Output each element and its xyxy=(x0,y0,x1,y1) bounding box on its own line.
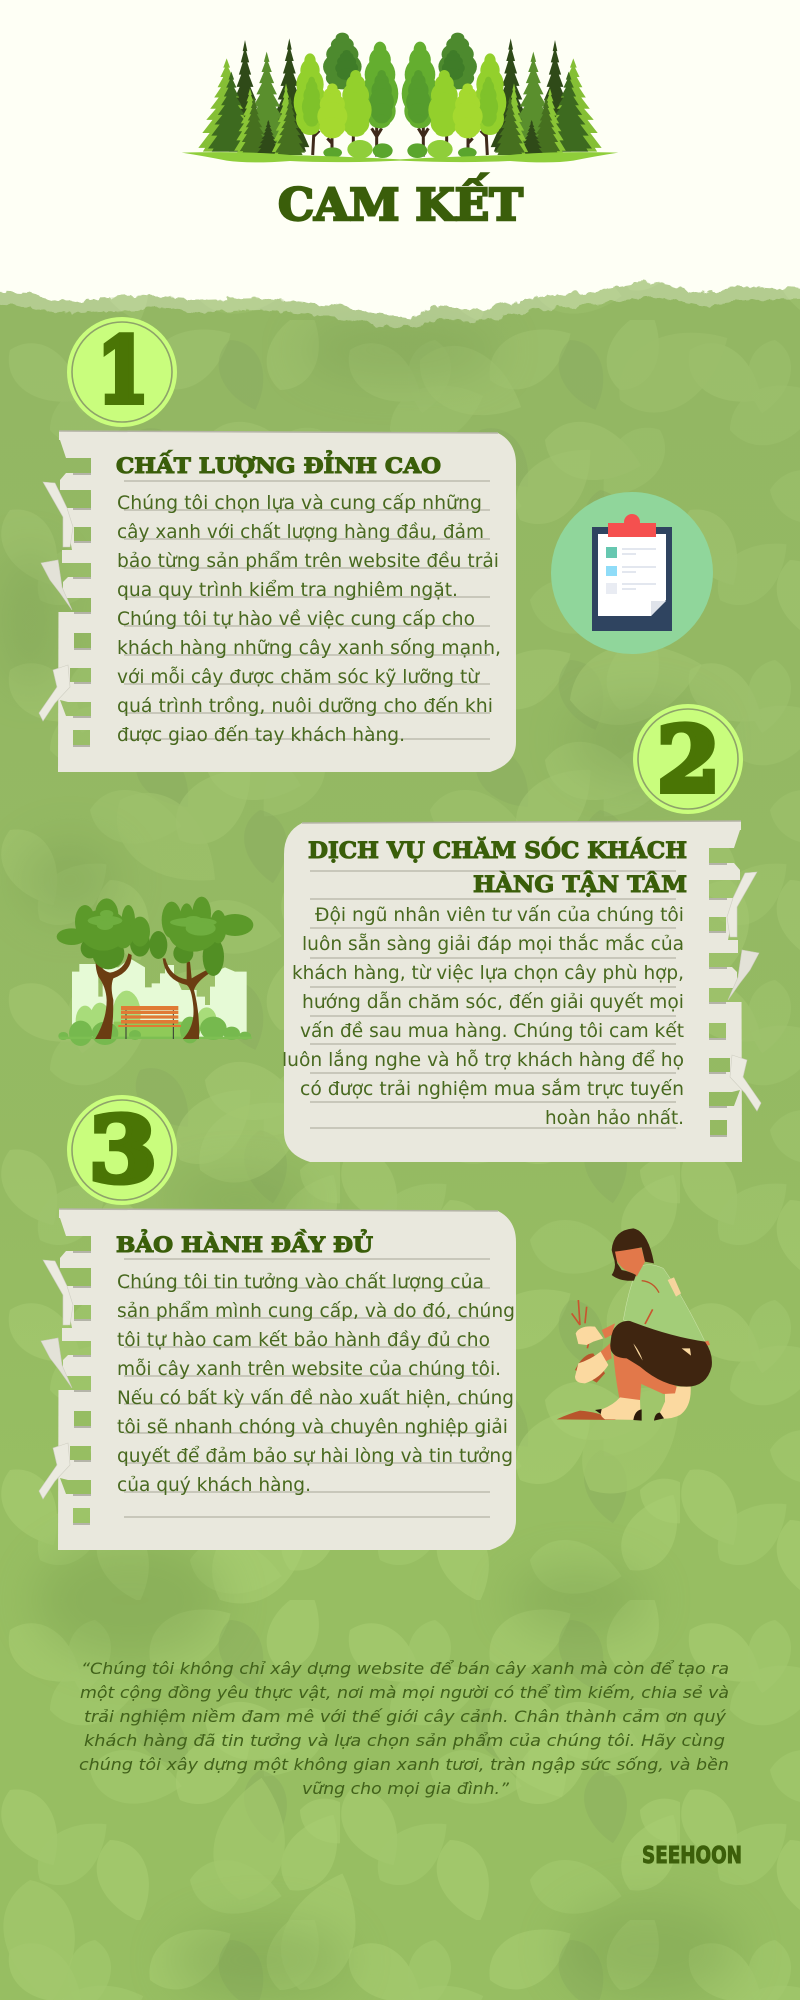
panel 1 text: qua quy trình kiểm tra nghiêm ngặt. xyxy=(117,579,458,601)
panel 2 text: vấn đề sau mua hàng. Chúng tôi cam kết xyxy=(300,1020,684,1042)
closing quote: “Chúng tôi không chỉ xây dựng website để bán cây xanh mà còn để tạo ra xyxy=(81,1659,729,1678)
panel 2 heading xyxy=(308,837,687,898)
panel 3 text: Nếu có bất kỳ vấn đề nào xuất hiện, chúng xyxy=(117,1387,514,1409)
panel 3 text xyxy=(117,1271,515,1496)
panel 2 heading: HÀNG TẬN TÂM xyxy=(473,871,687,898)
panel 3 text: sản phẩm mình cung cấp, và do đó, chúng xyxy=(117,1300,515,1322)
panel 1 text: khách hàng những cây xanh sống mạnh, xyxy=(117,637,501,659)
panel 2 text: luôn sẵn sàng giải đáp mọi thắc mắc của xyxy=(302,932,684,955)
panel 1 text: quá trình trồng, nuôi dưỡng cho đến khi xyxy=(117,695,493,717)
panel 2: dịch vụ chăm sóc khách hàng tận tâm xyxy=(282,821,761,1162)
panel 1 text: bảo từng sản phẩm trên website đều trải xyxy=(117,550,499,572)
panel 3 text: Chúng tôi tin tưởng vào chất lượng của xyxy=(117,1271,484,1293)
torn paper header xyxy=(0,0,800,328)
panel 3 text: của quý khách hàng. xyxy=(117,1474,311,1496)
closing quote: chúng tôi xây dựng một không gian xanh tươi, tràn ngập sức sống, và bền xyxy=(79,1755,729,1774)
panel 2 text: Đội ngũ nhân viên tư vấn của chúng tôi xyxy=(315,904,684,926)
panel 3 text: mỗi cây xanh trên website của chúng tôi. xyxy=(117,1357,501,1380)
panel 2 text: hướng dẫn chăm sóc, đến giải quyết mọi xyxy=(302,990,684,1013)
panel 1 text: Chúng tôi chọn lựa và cung cấp những xyxy=(117,492,482,514)
number badge 3: 3 xyxy=(89,1097,157,1203)
panel 1 text xyxy=(117,492,501,746)
panel 2 text: luôn lắng nghe và hỗ trợ khách hàng để họ xyxy=(282,1048,684,1071)
panel 1 text: với mỗi cây được chăm sóc kỹ lưỡng từ xyxy=(117,665,480,688)
panel 1 text: Chúng tôi tự hào về việc cung cấp cho xyxy=(117,608,475,630)
panel 2 text: hoàn hảo nhất. xyxy=(545,1107,684,1129)
closing quote: khách hàng đã tin tưởng và lựa chọn sản phẩm của chúng tôi. Hãy cùng xyxy=(84,1731,725,1750)
dark patches xyxy=(0,320,740,2000)
panel 2 heading: DỊCH VỤ CHĂM SÓC KHÁCH xyxy=(308,837,687,864)
number badge 2: 2 xyxy=(657,707,720,813)
panel 3 text: tôi sẽ nhanh chóng và chuyên nghiệp giải xyxy=(117,1416,508,1438)
panel 1 heading: CHẤT LƯỢNG ĐỈNH CAO xyxy=(116,451,441,478)
illustration: forest xyxy=(182,33,618,162)
panel 1 text: cây xanh với chất lượng hàng đầu, đảm xyxy=(117,521,484,543)
panel 1 text: được giao đến tay khách hàng. xyxy=(117,724,405,746)
closing quote xyxy=(79,1659,729,1798)
closing quote: trải nghiệm niềm đam mê với thế giới cây cảnh. Chân thành cảm ơn quý xyxy=(84,1707,727,1726)
closing quote: một cộng đồng yêu thực vật, nơi mà mọi người có thể tìm kiếm, chia sẻ và xyxy=(80,1683,729,1702)
panel 2 text xyxy=(282,904,684,1129)
number badge 1 xyxy=(67,317,177,427)
number badge 2 xyxy=(633,704,743,814)
number badge 1: 1 xyxy=(97,318,149,424)
panel 2 text: có được trải nghiệm mua sắm trực tuyến xyxy=(300,1077,684,1100)
panel 3 text: tôi tự hào cam kết bảo hành đầy đủ cho xyxy=(117,1329,490,1351)
panel 3 text: quyết để đảm bảo sự hài lòng và tin tưởng xyxy=(117,1445,513,1467)
icon: clipboard xyxy=(551,492,713,654)
title: CAM KẾT xyxy=(278,172,523,231)
panel 3: bảo hành đầy đủ xyxy=(39,1209,516,1550)
number badge 3 xyxy=(67,1095,177,1205)
panel 1: chất lượng đỉnh cao xyxy=(39,431,516,772)
icon: park with trees and bench xyxy=(57,897,253,1046)
illustration: woman planting xyxy=(557,1228,712,1421)
panel 3 heading: BẢO HÀNH ĐẦY ĐỦ xyxy=(116,1229,373,1257)
brand name: SEEHOON xyxy=(642,1843,742,1869)
panel 2 text: khách hàng, từ việc lựa chọn cây phù hợp, xyxy=(292,962,684,984)
closing quote: vững cho mọi gia đình.” xyxy=(302,1779,510,1798)
